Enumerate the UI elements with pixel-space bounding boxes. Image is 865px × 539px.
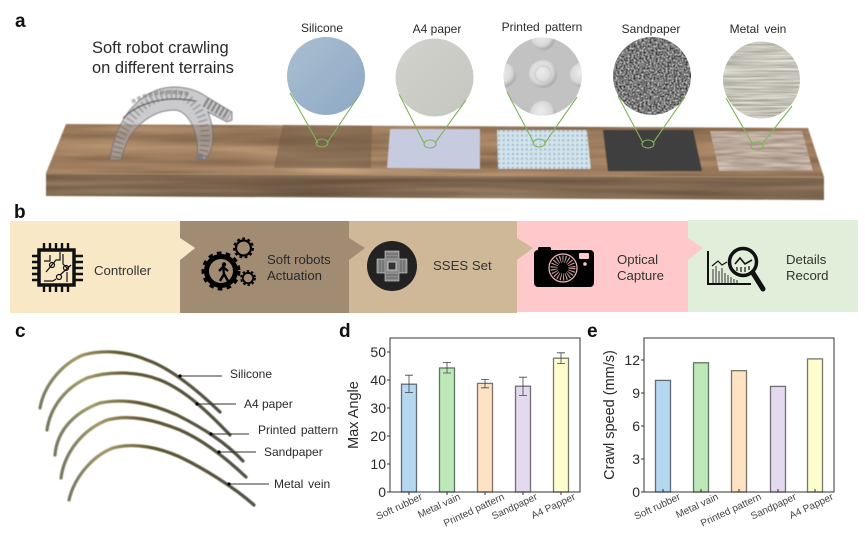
icon: gears <box>204 238 255 288</box>
panel label d: d <box>339 321 351 342</box>
label: metal vein: Metal vein <box>730 22 786 36</box>
y tick labels: 10 <box>370 456 386 472</box>
icon: chart and magnifier <box>708 248 763 289</box>
tick marks <box>387 352 561 495</box>
step: SSES set <box>349 221 533 313</box>
title: soft robot crawling: Soft robot crawling <box>92 39 229 57</box>
y tick labels: 12 <box>624 352 640 368</box>
x tick labels: Soft rubber <box>375 491 425 523</box>
x tick labels: Printed pattern <box>442 492 506 529</box>
label: sandpaper: Sandpaper <box>622 22 680 36</box>
panel a: soft robot on terrains <box>15 11 824 200</box>
text: optical capture: Capture <box>617 268 664 283</box>
error bars <box>405 353 565 395</box>
x tick labels: Sandpaper <box>490 491 540 522</box>
callout: silicone <box>178 367 272 381</box>
panel label e: e <box>587 321 598 342</box>
axes frame <box>390 338 580 492</box>
magnifier: sandpaper <box>613 22 691 148</box>
icon: SSES circle <box>367 241 417 291</box>
magnifier: metal vein <box>723 22 800 150</box>
text: details record: Details <box>786 252 826 267</box>
y tick labels: 50 <box>370 344 386 360</box>
x tick labels: A4 Papper <box>530 491 578 522</box>
step: details record <box>688 220 858 312</box>
callout: silicone: Silicone <box>230 367 272 381</box>
step: controller <box>10 221 195 313</box>
x tick labels: Metal vain <box>416 492 462 521</box>
magnifier: printed pattern <box>502 22 582 148</box>
panel label c: c <box>15 321 26 342</box>
y tick labels: 40 <box>370 372 386 388</box>
bars <box>402 358 568 492</box>
terrain patches <box>274 125 813 171</box>
y tick labels <box>370 344 386 500</box>
x tick labels: Sandpaper <box>749 491 799 522</box>
y tick labels: 9 <box>632 385 640 401</box>
x tick labels: Printed pattern <box>699 492 763 529</box>
x tick labels <box>633 491 836 529</box>
y tick labels: 6 <box>632 418 640 434</box>
y axis title: Max Angle <box>346 381 362 449</box>
icon: chip <box>32 243 83 292</box>
panel e: crawl speed bar chart <box>587 321 836 529</box>
callout: printed pattern: Printed pattern <box>258 423 338 437</box>
magnifier: A4 paper <box>396 22 474 148</box>
text: controller: Controller <box>94 263 152 278</box>
curves <box>40 352 254 505</box>
x tick labels: Soft rubber <box>633 491 683 523</box>
panel b: process flow <box>10 202 858 313</box>
y tick labels: 20 <box>370 428 386 444</box>
y tick labels: 3 <box>632 451 640 467</box>
y tick labels: 0 <box>378 484 386 500</box>
step: optical capture <box>517 221 703 312</box>
panel d: max angle bar chart <box>339 321 580 529</box>
text: optical capture: Optical <box>617 252 658 267</box>
title: soft robot crawling: on different terrains <box>92 59 234 77</box>
callout: metal vein: Metal vein <box>274 477 330 491</box>
step: soft robots actuation <box>180 221 365 313</box>
magnifier: silicone <box>287 21 365 147</box>
text: soft robots actuation: Actuation <box>267 268 322 283</box>
y axis title: Crawl speed (mm/s) <box>602 350 618 480</box>
bars <box>656 359 822 492</box>
icon: camera <box>534 247 594 287</box>
callout: sandpaper: Sandpaper <box>264 445 323 459</box>
y tick labels: 30 <box>370 400 386 416</box>
panel label a: a <box>15 11 26 32</box>
label: printed pattern: Printed pattern <box>502 20 582 34</box>
panel c: deformation curves <box>15 321 338 505</box>
panel label b: b <box>14 202 26 223</box>
callout: A4 paper <box>195 397 293 411</box>
text: details record: Record <box>786 268 829 283</box>
text: soft robots actuation: Soft robots <box>267 252 331 267</box>
y tick labels: 0 <box>632 484 640 500</box>
label: A4 paper: A4 paper <box>413 22 461 36</box>
x tick labels <box>375 491 578 529</box>
x tick labels: A4 Papper <box>788 491 836 522</box>
callout: printed pattern <box>209 423 338 437</box>
wooden plank <box>46 124 824 200</box>
callout: sandpaper <box>217 445 323 459</box>
callout: metal vein <box>227 477 330 491</box>
y tick labels <box>624 352 640 500</box>
axes frame <box>644 338 834 492</box>
x tick labels: Metal vain <box>674 492 720 521</box>
text: SSES set: SSES Set <box>433 258 492 273</box>
callout: A4 paper: A4 paper <box>244 397 293 411</box>
robot <box>110 87 232 160</box>
tick marks <box>641 360 815 492</box>
label: silicone: Silicone <box>301 21 343 35</box>
